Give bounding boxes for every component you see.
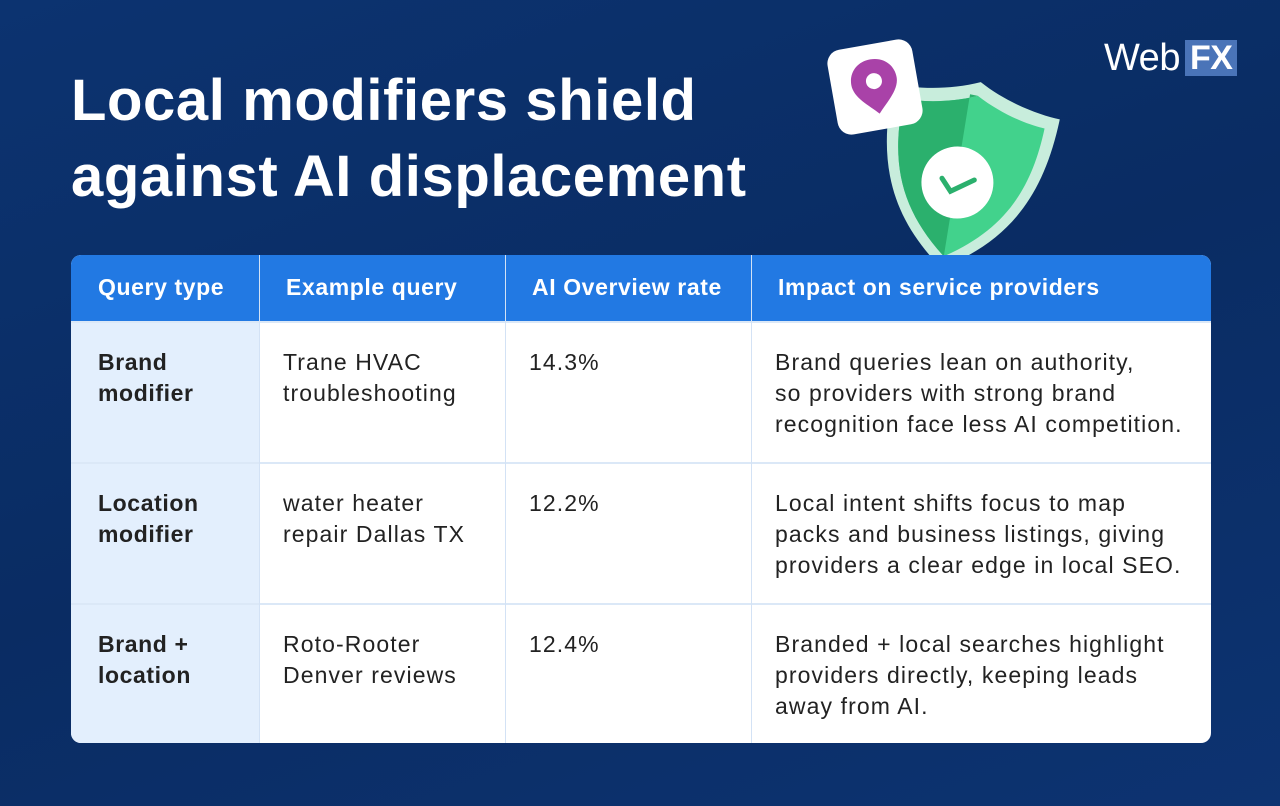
row: location modifier: repair Dallas TX	[283, 521, 465, 547]
row: brand + location	[71, 603, 1211, 744]
row: brand + location: Denver reviews	[283, 662, 457, 688]
row: brand + location: away from AI.	[775, 693, 929, 719]
table	[71, 255, 1211, 743]
row: brand + location: Brand +	[98, 631, 188, 657]
row: brand modifier	[71, 321, 1211, 462]
row: location modifier: modifier	[98, 521, 194, 547]
table header: Impact on service providers	[778, 274, 1100, 300]
row: location modifier: Location	[98, 490, 199, 516]
row: location modifier: 12.2%	[529, 490, 600, 516]
table header: Example query	[286, 274, 457, 300]
row: brand modifier: Brand	[98, 349, 167, 375]
row: brand + location: 12.4%	[529, 631, 600, 657]
row: location modifier: Local intent shifts focus to map	[775, 490, 1126, 516]
table header	[71, 255, 1211, 321]
row: brand + location: Branded + local searches highlight	[775, 631, 1165, 657]
row: location modifier: providers a clear edge in local SEO.	[775, 552, 1182, 578]
title	[71, 68, 747, 209]
row: brand modifier: troubleshooting	[283, 380, 457, 406]
row: brand modifier: modifier	[98, 380, 194, 406]
logo: WebFX	[1104, 36, 1237, 78]
title: against AI displacement	[71, 144, 747, 209]
row: location modifier	[71, 462, 1211, 603]
row: brand modifier: Trane HVAC	[283, 349, 422, 375]
icon: shield with check	[886, 82, 1060, 255]
row: location modifier: packs and business listings, giving	[775, 521, 1165, 547]
row: location modifier: water heater	[283, 490, 424, 516]
title: Local modifiers shield	[71, 68, 697, 133]
icon: location pin tile	[827, 39, 923, 135]
table header: AI Overview rate	[532, 274, 722, 300]
logo: WebFX: FX	[1190, 39, 1232, 77]
row: brand + location: location	[98, 662, 191, 688]
row: brand modifier: recognition face less AI competition.	[775, 411, 1183, 437]
logo: WebFX: Web	[1104, 36, 1180, 78]
row: brand + location: providers directly, keeping leads	[775, 662, 1138, 688]
table header: Query type	[98, 274, 224, 300]
row: brand modifier: 14.3%	[529, 349, 600, 375]
row: brand modifier: so providers with strong brand	[775, 380, 1116, 406]
row: brand + location: Roto-Rooter	[283, 631, 420, 657]
row: brand modifier: Brand queries lean on authority,	[775, 349, 1135, 375]
